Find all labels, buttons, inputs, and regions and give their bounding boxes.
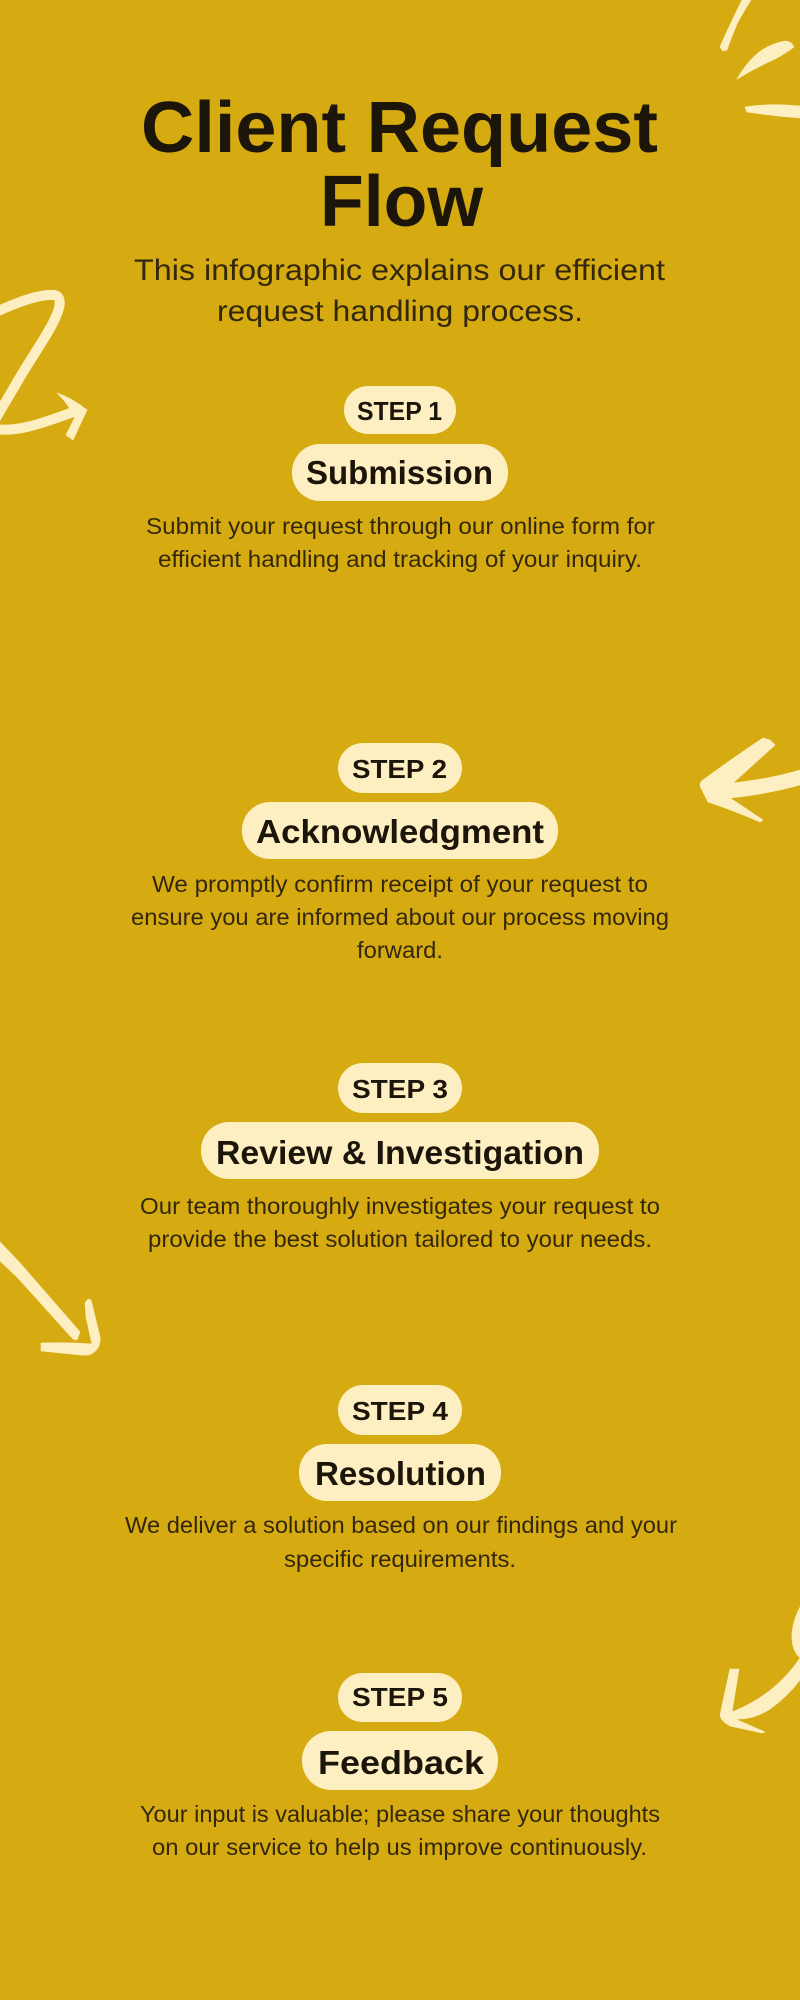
step 2 badge: STEP 2 bbox=[352, 754, 447, 784]
step 2 description: forward. bbox=[357, 937, 443, 963]
step 2 heading bbox=[242, 802, 558, 859]
step 3 description: provide the best solution tailored to your needs. bbox=[148, 1226, 652, 1252]
step 1 description: Submit your request through our online form for bbox=[146, 513, 655, 539]
step 2 badge bbox=[338, 743, 462, 793]
step 4 description: We deliver a solution based on our findings and your bbox=[125, 1512, 677, 1538]
step 3 badge: STEP 3 bbox=[352, 1074, 448, 1104]
step 5 badge bbox=[338, 1673, 462, 1722]
step 2 description bbox=[131, 871, 669, 963]
arrow: left looping arrow pointing right bbox=[0, 295, 87, 440]
step 1 description: efficient handling and tracking of your inquiry. bbox=[158, 546, 642, 572]
step 1 description bbox=[146, 513, 655, 572]
step 3 heading: Review & Investigation bbox=[216, 1134, 584, 1171]
step 2 description: ensure you are informed about our process moving bbox=[131, 904, 669, 930]
arrow: right arrow pointing left bbox=[700, 738, 800, 822]
step 3 badge bbox=[338, 1063, 462, 1113]
step 5 heading: Feedback bbox=[318, 1744, 485, 1781]
panel: step 1 bbox=[146, 386, 655, 572]
step 3 description: Our team thoroughly investigates your request to bbox=[140, 1193, 660, 1219]
step 5 description: on our service to help us improve continuously. bbox=[152, 1834, 647, 1860]
step 4 heading bbox=[299, 1444, 501, 1501]
step 5 heading bbox=[302, 1731, 498, 1790]
step 1 heading: Submission bbox=[306, 454, 493, 491]
subtitle: request handling process. bbox=[217, 295, 583, 328]
step 4 badge bbox=[338, 1385, 462, 1435]
step 3 heading bbox=[201, 1122, 599, 1179]
step 1 badge: STEP 1 bbox=[357, 396, 442, 426]
step 2 heading: Acknowledgment bbox=[256, 813, 544, 850]
arrow: left diagonal arrow pointing down right bbox=[0, 1242, 100, 1355]
step 1 badge bbox=[344, 386, 456, 434]
title: Client Request bbox=[141, 88, 658, 168]
panel: step 5 bbox=[140, 1673, 660, 1860]
arrow: right curved arrow pointing down left bbox=[720, 1607, 800, 1733]
step 4 description: specific requirements. bbox=[284, 1546, 516, 1572]
panel: step 4 bbox=[125, 1385, 677, 1572]
step 5 description bbox=[140, 1801, 660, 1860]
panel: step 3 bbox=[140, 1063, 660, 1252]
step 4 badge: STEP 4 bbox=[352, 1396, 449, 1426]
step 5 badge: STEP 5 bbox=[352, 1682, 448, 1712]
icon: top right burst strokes bbox=[720, 0, 800, 118]
step 1 heading bbox=[292, 444, 508, 501]
step 2 description: We promptly confirm receipt of your request to bbox=[152, 871, 648, 897]
step 4 heading: Resolution bbox=[315, 1455, 486, 1492]
step 5 description: Your input is valuable; please share your thoughts bbox=[140, 1801, 660, 1827]
title: Flow bbox=[320, 162, 484, 242]
step 3 description bbox=[140, 1193, 660, 1252]
step 4 description bbox=[125, 1512, 677, 1572]
subtitle bbox=[134, 254, 666, 328]
title bbox=[141, 88, 658, 242]
subtitle: This infographic explains our efficient bbox=[134, 254, 666, 287]
panel: step 2 bbox=[131, 743, 669, 963]
